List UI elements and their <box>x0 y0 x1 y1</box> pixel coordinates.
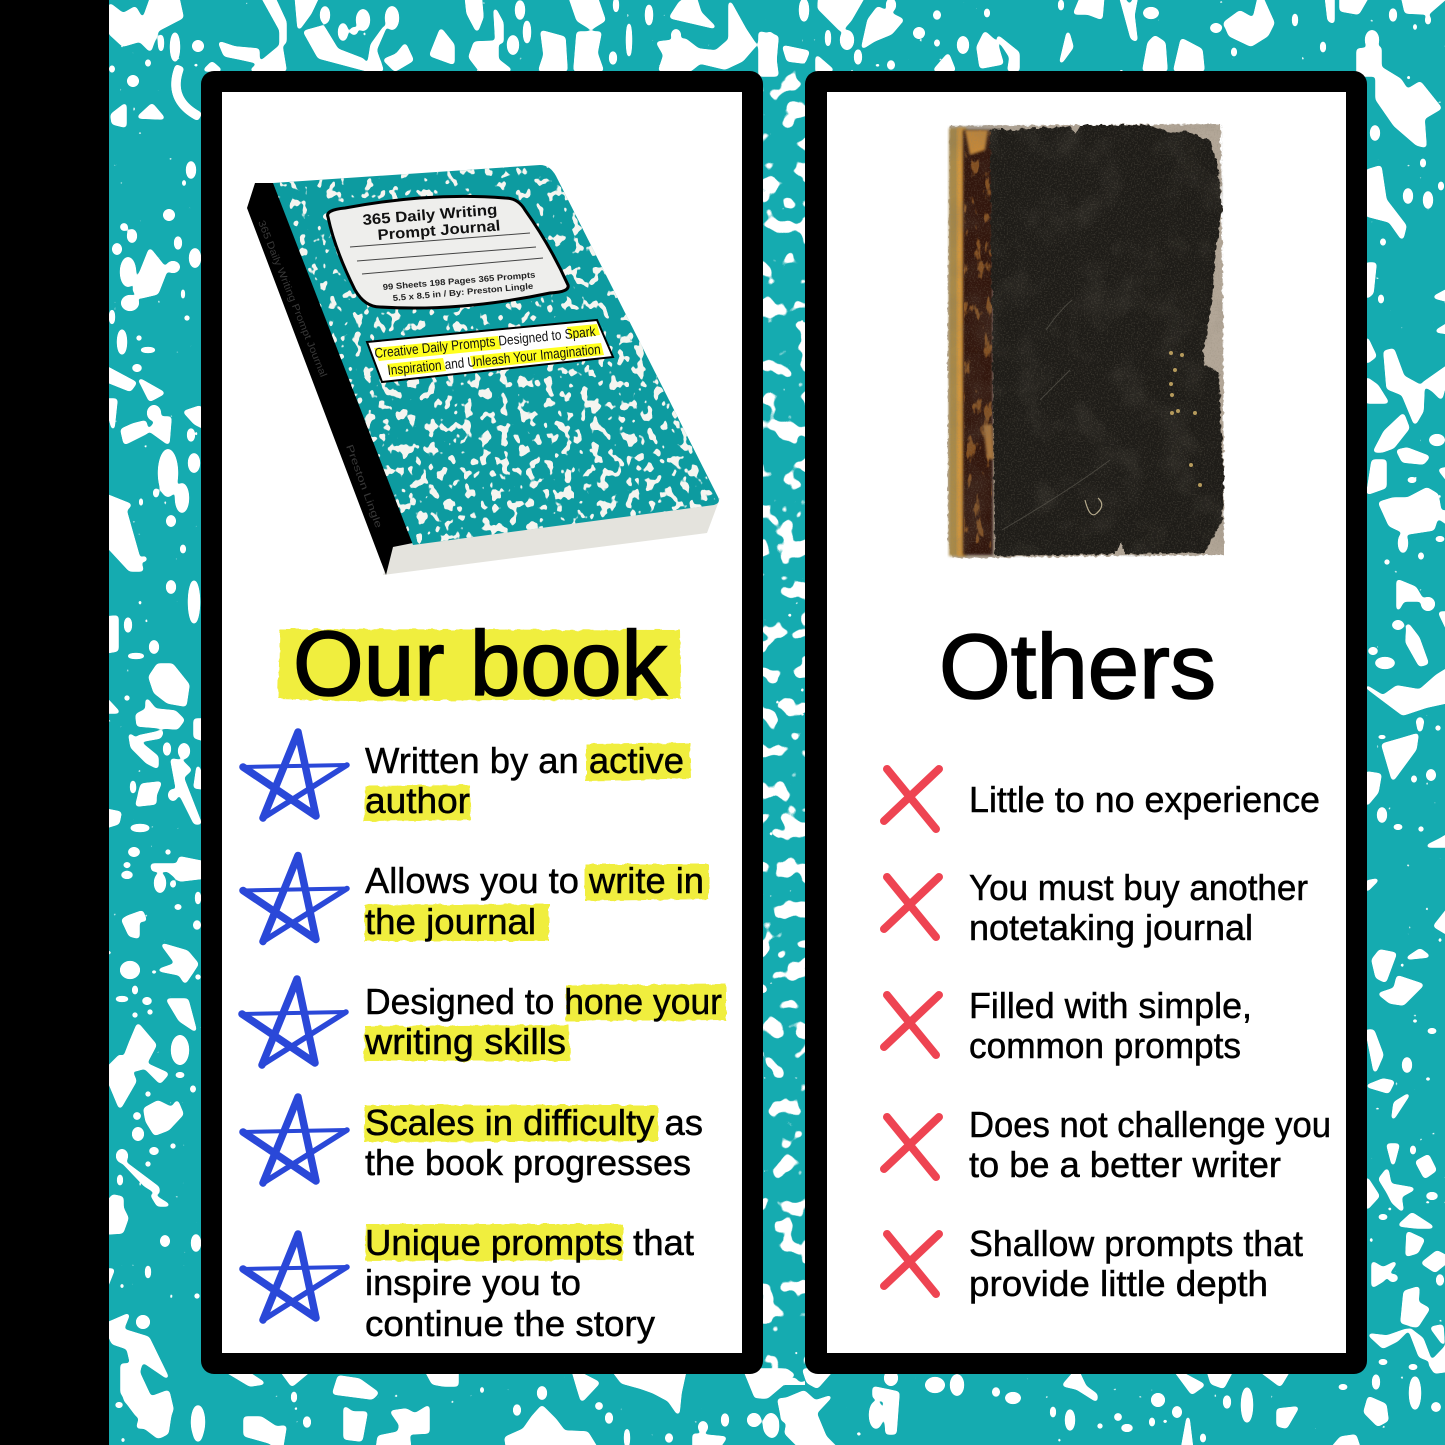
icon: red x <box>884 877 939 937</box>
item: does not challenge you: to be a better writer <box>969 1144 1281 1185</box>
image: old worn black book <box>948 124 1225 558</box>
icon: red x <box>884 1234 939 1294</box>
item: written by an active author <box>243 732 691 821</box>
scuffs <box>1002 300 1110 530</box>
item: designed to hone your writing skills: writing skills <box>364 1021 566 1062</box>
icon: red x <box>884 995 939 1055</box>
icon: blue star <box>243 856 347 942</box>
item: must buy another journal <box>884 867 1308 948</box>
item: unique prompts: inspire you to <box>365 1262 581 1303</box>
item: shallow prompts: Shallow prompts that <box>969 1223 1303 1264</box>
item: simple, common prompts <box>884 985 1252 1066</box>
item: simple, common prompts: Filled with simple, <box>969 985 1252 1026</box>
icon: red x <box>884 1117 939 1177</box>
item: shallow prompts: provide little depth <box>969 1263 1268 1304</box>
item: scales in difficulty: Scales in difficulty as <box>365 1102 703 1143</box>
cover speckle <box>260 160 730 550</box>
item: unique prompts: continue the story <box>365 1303 656 1344</box>
item: scales in difficulty <box>243 1097 703 1183</box>
item: simple, common prompts: common prompts <box>969 1025 1241 1066</box>
spine: Preston Lingle <box>343 443 384 530</box>
item: unique prompts <box>243 1222 694 1344</box>
spine binding <box>949 128 967 556</box>
icon: blue star <box>243 732 347 818</box>
cover label: 99 Sheets 198 Pages 365 Prompts <box>382 269 536 292</box>
cover label: 5.5 x 8.5 in / By: Preston Lingle <box>392 281 534 303</box>
heading: Others: Others <box>939 616 1216 718</box>
item: must buy another journal: notetaking journal <box>969 907 1253 948</box>
icon: blue star <box>243 1234 347 1320</box>
item: unique prompts: Unique prompts that <box>365 1222 694 1263</box>
item: designed to hone your writing skills: Designed to hone your <box>365 981 722 1022</box>
item: allows you to write in the journal: the journal <box>365 901 536 942</box>
cover label <box>328 196 568 308</box>
item: little to no experience: Little to no experience <box>969 779 1320 820</box>
cover tagline box <box>367 320 613 382</box>
heading: Our book: Our book <box>293 613 668 715</box>
panel: our book <box>201 71 763 1374</box>
icon: blue star <box>242 979 346 1065</box>
spine: 365 Daily Writing Prompt Journal <box>255 219 328 379</box>
item: shallow prompts <box>884 1223 1303 1304</box>
item: written by an active author: author <box>365 780 470 821</box>
black cover <box>990 125 1224 556</box>
page block <box>383 498 720 575</box>
image: 365 Daily Writing Prompt Journal book <box>247 160 730 575</box>
icon: blue star <box>243 1097 347 1183</box>
item: allows you to write in the journal: Allows you to write in <box>365 860 704 901</box>
item: does not challenge you: Does not challenge you <box>969 1104 1331 1145</box>
item: written by an active author: Written by an active <box>365 740 684 781</box>
spine <box>247 183 413 575</box>
cover tagline box: Inspiration and Unleash Your Imagination <box>387 341 601 378</box>
panel: others <box>805 71 1367 1374</box>
item: must buy another journal: You must buy another <box>969 867 1308 908</box>
cover tagline box: Creative Daily Prompts Designed to Spark <box>374 323 597 361</box>
item: designed to hone your writing skills <box>242 979 726 1065</box>
item: little to no experience <box>884 769 1320 829</box>
cover label: 365 Daily Writing <box>362 201 498 229</box>
item: scales in difficulty: the book progresses <box>365 1142 691 1183</box>
black left band <box>0 0 109 1445</box>
icon: red x <box>884 769 939 829</box>
cover label: Prompt Journal <box>377 217 501 244</box>
item: does not challenge you <box>884 1104 1331 1185</box>
item: allows you to write in the journal <box>243 856 709 942</box>
